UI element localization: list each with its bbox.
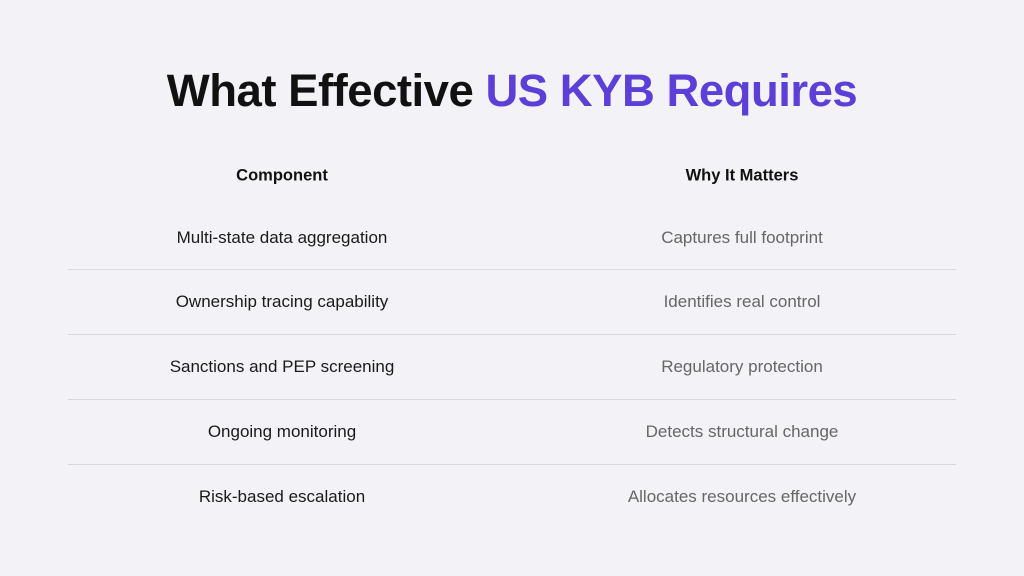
row 3 component: Sanctions and PEP screening <box>170 357 394 376</box>
row 4 reason: Detects structural change <box>646 422 838 441</box>
header: why it matters: Why It Matters <box>686 166 798 184</box>
row 1 reason: Captures full footprint <box>661 228 823 247</box>
row 4 component: Ongoing monitoring <box>208 422 356 441</box>
row 1 component: Multi-state data aggregation <box>177 228 387 247</box>
header: component: Component <box>236 166 328 184</box>
title: What Effective US KYB Requires <box>167 65 857 116</box>
row 2 reason: Identifies real control <box>664 292 820 311</box>
row 3 reason: Regulatory protection <box>661 357 823 376</box>
row 5 reason: Allocates resources effectively <box>628 487 856 506</box>
row 5 component: Risk-based escalation <box>199 487 365 506</box>
row 2 component: Ownership tracing capability <box>176 292 388 311</box>
